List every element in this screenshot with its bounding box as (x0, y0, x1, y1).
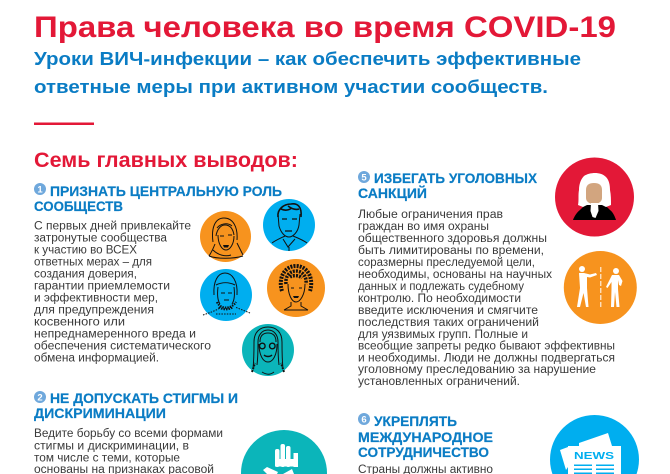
panel: finding 2 (34, 391, 327, 474)
body text 5: для уязвимых групп. Полные и (358, 329, 528, 341)
body text 1: создания доверия, (34, 268, 137, 280)
body text 1: для предупреждения (34, 304, 154, 316)
body text 2: стигмы и дискриминации, в (34, 440, 189, 452)
heading 5: САНКЦИЙ (358, 186, 427, 201)
heading 6: МЕЖДУНАРОДНОЕ (358, 430, 493, 445)
body text 5: контролю. По необходимости (358, 293, 521, 305)
body text 5: граждан во имя охраны (358, 221, 489, 233)
heading 6 (358, 414, 493, 460)
body text 1: ответных мерах – для (34, 256, 152, 268)
body text 5: введите исключения и смягчите (358, 305, 538, 317)
heading 6: УКРЕПЛЯТЬ (374, 414, 457, 429)
body text 1: непреднамеренного вреда и (34, 328, 196, 340)
panel: finding 5 (358, 158, 637, 388)
body text 5: данных и подлежать судебному (358, 281, 524, 293)
body text 5 (358, 209, 615, 388)
body text 5: последствия таких ограничений (358, 317, 539, 329)
body text 1: обмена информацией. (34, 352, 159, 364)
icon: newspaper (550, 415, 639, 474)
icon: young man (263, 199, 315, 251)
subtitle: ответные меры при активном участии сообществ. (34, 76, 548, 97)
number badge 1: 1 (37, 184, 43, 196)
body text 1: обеспечения систематического (34, 340, 211, 352)
body text 5: всеобщие запреты редко бывают эффективны (358, 340, 615, 352)
number badge 2 (34, 391, 46, 404)
body text 5: необходимы, основаны на научных (358, 269, 552, 281)
icon: bearded man (200, 269, 252, 321)
body text 5: уголовному преследованию за нарушение (358, 364, 596, 376)
body text 2 (34, 428, 223, 474)
body text 1 (34, 220, 211, 364)
body text 5: и необходимы. Люди не должны подвергаться (358, 352, 615, 364)
body text 1: к участию во ВСЕХ (34, 244, 137, 256)
body text 2: том числе с теми, которые (34, 452, 180, 464)
section heading: seven key findings: Семь главных выводов: (34, 149, 298, 172)
icon: newspaper: NEWS (574, 450, 614, 462)
body text 5: общественного здоровья должны (358, 233, 547, 245)
body text 2: Ведите борьбу со всеми формами (34, 428, 223, 440)
heading 6: СОТРУДНИЧЕСТВО (358, 445, 489, 460)
heading 1 (34, 184, 282, 214)
subtitle: Уроки ВИЧ-инфекции – как обеспечить эффективные (34, 48, 581, 69)
panel: finding 1 (34, 183, 325, 376)
body text 1: косвенного или (34, 316, 125, 328)
heading 1: ПРИЗНАТЬ ЦЕНТРАЛЬНУЮ РОЛЬ (50, 184, 282, 199)
title: Права человека во время COVID-19 (34, 11, 616, 44)
number badge 6 (358, 413, 370, 426)
heading 5: ИЗБЕГАТЬ УГОЛОВНЫХ (374, 171, 537, 186)
number badge 5: 5 (361, 172, 367, 184)
heading 1: СООБЩЕСТВ (34, 199, 123, 214)
body text 1: затронутые сообщества (34, 232, 168, 244)
body text 5: Любые ограничения прав (358, 209, 503, 221)
icon: woman with curly hair (267, 259, 325, 317)
subtitle (34, 48, 581, 97)
body text 5: соразмерны преследуемой цели, (358, 257, 535, 269)
body text 1: С первых дней привлекайте (34, 220, 191, 232)
body text 1: и эффективности мер, (34, 292, 158, 304)
heading 2: ДИСКРИМИНАЦИИ (34, 406, 166, 421)
number badge 1 (34, 183, 46, 196)
body text 5: установленных ограничений. (358, 376, 520, 388)
icon: physical distancing (564, 251, 637, 324)
icon: raised hand (241, 430, 327, 474)
heading 5 (358, 171, 537, 201)
red divider (34, 122, 94, 125)
body text 5: быть лимитированы по времени, (358, 245, 544, 257)
heading 2 (34, 391, 238, 421)
body text 1: гарантии приемлемости (34, 280, 170, 292)
panel: finding 6 (358, 413, 639, 474)
number badge 6: 6 (361, 414, 367, 426)
icon: woman with long hair (242, 324, 294, 376)
number badge 5 (358, 171, 370, 184)
icon: judge (555, 158, 634, 236)
heading 2: НЕ ДОПУСКАТЬ СТИГМЫ И (50, 391, 238, 406)
icon: woman in headscarf (200, 211, 251, 262)
number badge 2: 2 (37, 392, 43, 404)
